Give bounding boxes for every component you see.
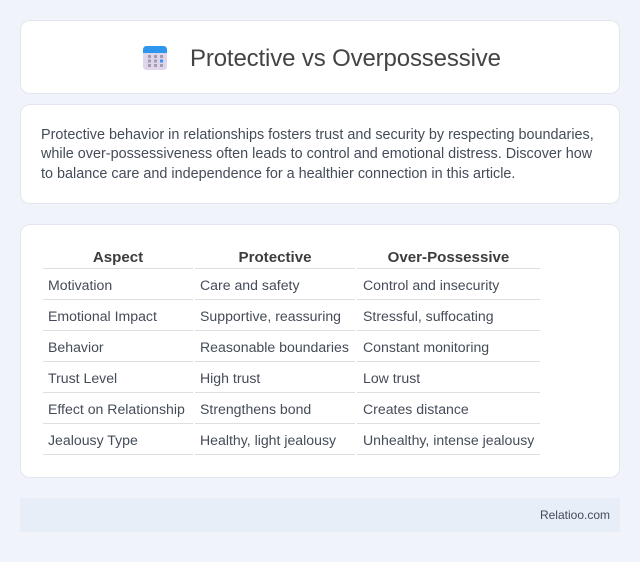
table header: Over-Possessive	[388, 249, 509, 266]
row: Emotional Impact	[48, 308, 494, 324]
footer	[20, 498, 620, 532]
table header: Aspect	[93, 249, 143, 266]
row: Behavior: Behavior	[48, 339, 104, 355]
footer brand: Relatioo.com	[540, 508, 610, 522]
row: Emotional Impact: Emotional Impact	[48, 308, 157, 324]
row: Effect on Relationship	[48, 401, 469, 417]
row: Trust Level: High trust	[200, 370, 260, 386]
row: Trust Level: Trust Level	[48, 370, 117, 386]
row: Behavior: Reasonable boundaries	[200, 339, 349, 355]
row: Effect on Relationship: Creates distance	[363, 401, 469, 417]
row: Jealousy Type: Unhealthy, intense jealousy	[363, 432, 534, 448]
table header: Protective	[238, 249, 312, 266]
row: Motivation: Motivation	[48, 277, 112, 293]
table header	[93, 249, 509, 266]
row: Behavior	[48, 339, 489, 355]
row: Trust Level	[48, 370, 420, 386]
icon: calendar	[143, 46, 167, 70]
row: Effect on Relationship: Effect on Relationship	[48, 401, 185, 417]
intro paragraph	[41, 126, 594, 182]
row: Jealousy Type: Healthy, light jealousy	[200, 432, 336, 448]
row: Motivation	[48, 277, 500, 293]
row: Motivation: Care and safety	[200, 277, 300, 293]
intro paragraph: to balance care and independence for a healthier connection in this article.	[41, 166, 515, 182]
panel: title card	[20, 20, 620, 94]
row: Trust Level: Low trust	[363, 370, 420, 386]
row: Effect on Relationship: Strengthens bond	[200, 401, 311, 417]
title: Protective vs Overpossessive	[190, 45, 501, 72]
row: Behavior: Constant monitoring	[363, 339, 489, 355]
intro paragraph: while over-possessiveness often leads to control and emotional distress. Discover how	[41, 146, 592, 162]
row: Emotional Impact: Stressful, suffocating	[363, 308, 494, 324]
row: Jealousy Type	[48, 432, 534, 448]
panel: comparison table	[20, 224, 620, 478]
panel: intro text	[20, 104, 620, 204]
intro paragraph: Protective behavior in relationships fosters trust and security by respecting boundaries,	[41, 126, 594, 142]
row: Emotional Impact: Supportive, reassuring	[200, 308, 341, 324]
row: Motivation: Control and insecurity	[363, 277, 499, 293]
row: Jealousy Type: Jealousy Type	[48, 432, 138, 448]
